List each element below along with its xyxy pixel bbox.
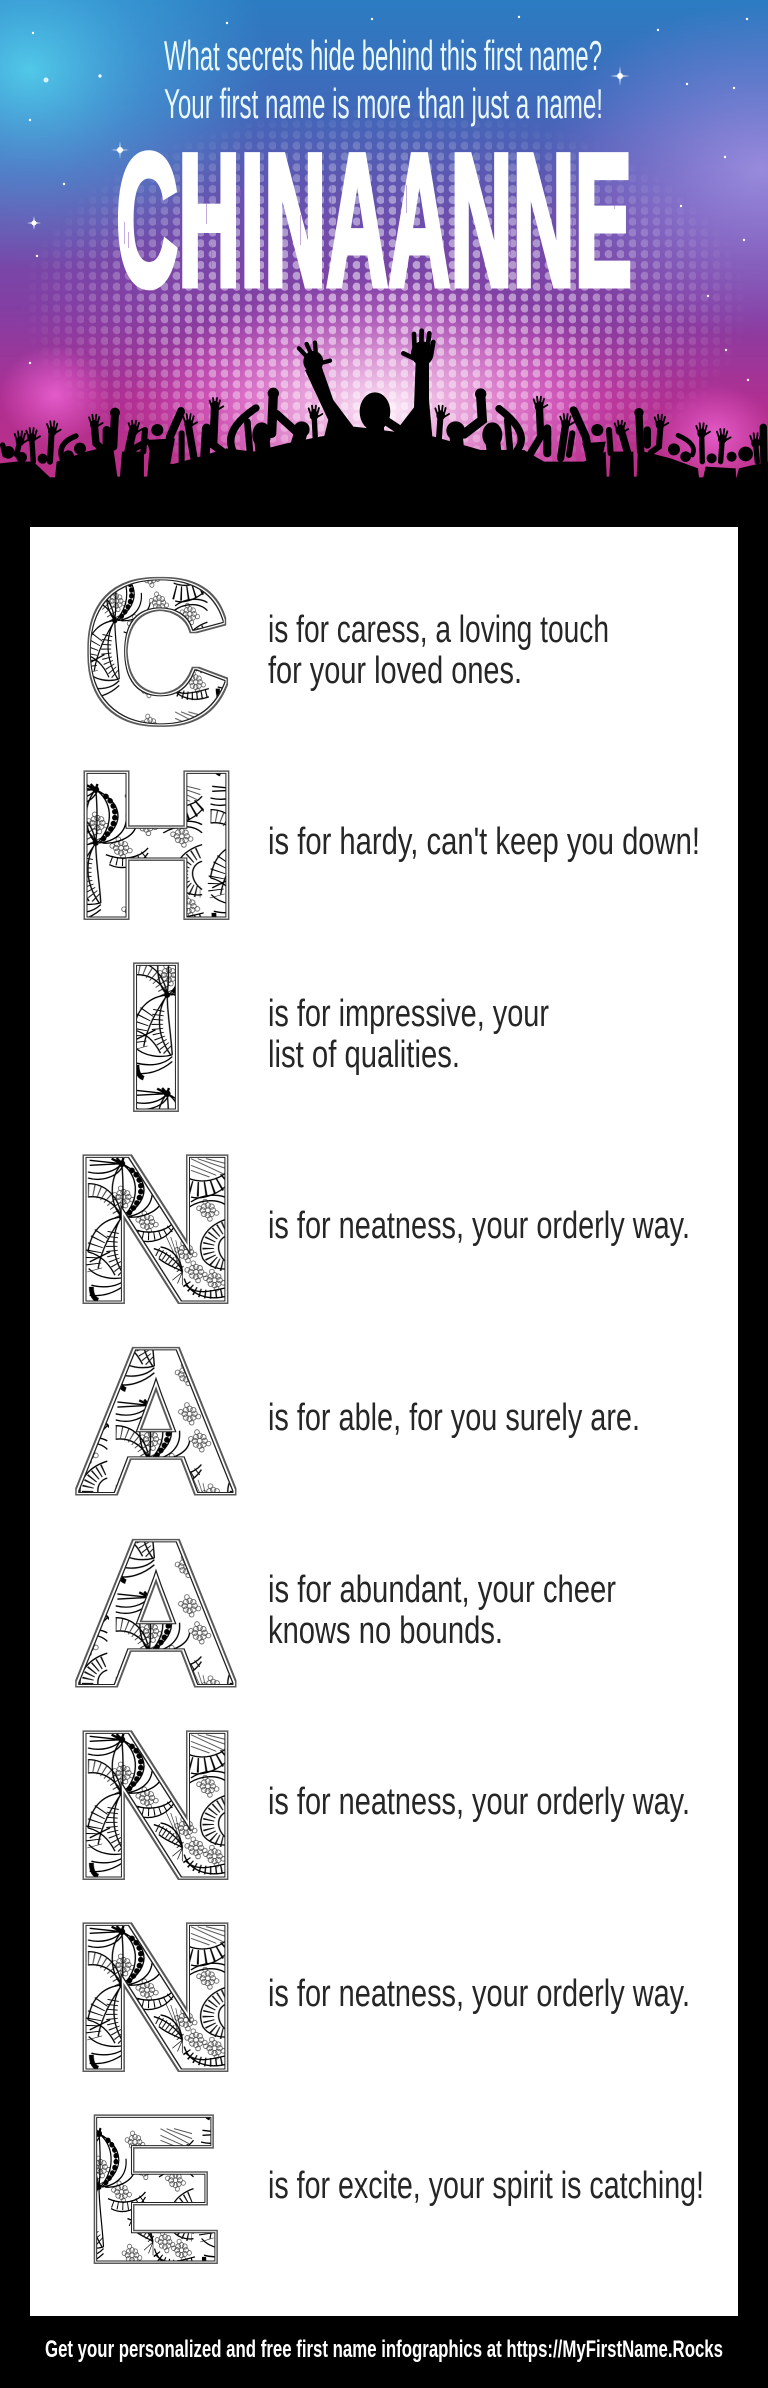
text: A second line	[268, 1569, 616, 1652]
text: C line: for your loved ones.	[268, 650, 522, 692]
icon: decorated letter N: N	[74, 1694, 237, 1917]
icon: decorated letter A: A	[75, 1308, 237, 1535]
row: N	[74, 1118, 690, 1341]
row: I	[125, 925, 549, 1148]
text: I line: list of qualities.	[268, 1034, 460, 1076]
icon: decorated letter N: N	[74, 1886, 237, 2109]
subtitle	[164, 32, 603, 127]
text: C line	[268, 609, 609, 692]
centre figure left arm	[299, 343, 390, 453]
crowd silhouette	[0, 331, 768, 527]
crowd: left half	[0, 343, 390, 500]
icon: decorated letter A: A	[75, 1500, 237, 1727]
hero panel	[0, 0, 768, 478]
distress marks on name	[124, 185, 615, 267]
icon: decorated letter C: C	[85, 543, 227, 761]
text: A second line: is for abundant, your cheer	[268, 1569, 616, 1611]
row: A second	[75, 1500, 616, 1727]
sparkles	[27, 16, 749, 381]
row: A	[75, 1308, 640, 1535]
row: N second	[74, 1694, 690, 1917]
text: A line: is for able, for you surely are.	[268, 1397, 640, 1439]
stage background	[0, 0, 768, 478]
crowd: right half	[381, 331, 768, 500]
icon: decorated letter N: N	[74, 1118, 237, 1341]
icon: decorated letter H: H	[75, 734, 238, 957]
row: H	[75, 734, 700, 957]
white content panel	[30, 527, 738, 2316]
text: I line	[268, 993, 549, 1076]
row: E	[86, 2078, 704, 2301]
icon: decorated letter I: I	[125, 925, 187, 1148]
text: A second line: knows no bounds.	[268, 1610, 503, 1652]
row: N third	[74, 1886, 690, 2109]
row: C	[85, 543, 609, 761]
icon: decorated letter E: E	[86, 2078, 220, 2301]
text: I line: is for impressive, your	[268, 993, 549, 1035]
text: C line: is for caress, a loving touch	[268, 609, 609, 651]
